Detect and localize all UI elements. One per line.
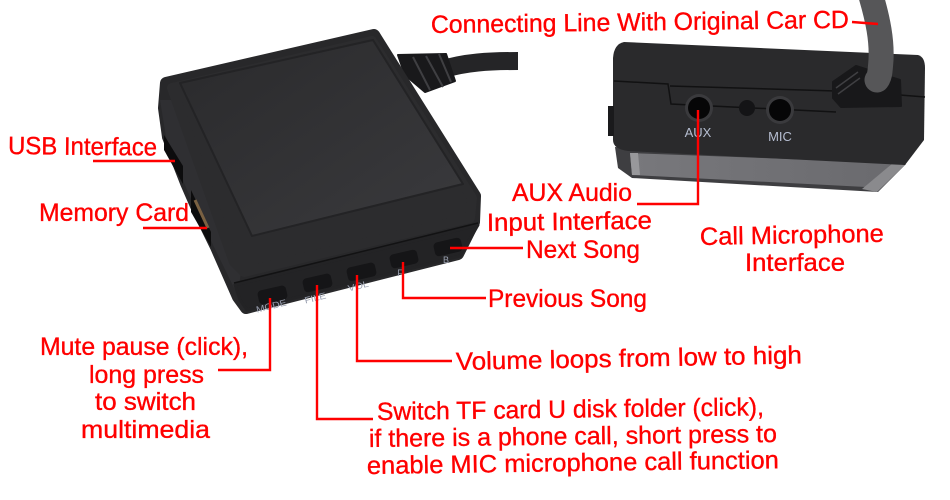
module left side face — [160, 100, 242, 296]
device: rear view of module — [608, 0, 925, 192]
module top inset panel — [180, 40, 463, 236]
usb slot — [164, 135, 183, 184]
callout: switch tf card — [317, 285, 779, 480]
callout: mute pause: multimedia — [81, 416, 210, 444]
callout: mute pause: long press — [89, 361, 204, 389]
callout: volume — [357, 275, 802, 376]
button: mode — [255, 285, 288, 315]
button: vol — [346, 262, 377, 293]
module body silhouette — [164, 35, 475, 308]
button: back: B — [443, 255, 449, 265]
callout: usb interface: USB Interface — [8, 132, 157, 162]
module seam — [234, 223, 478, 283]
side port nub — [608, 106, 614, 136]
device: main module, three-quarter view — [160, 35, 518, 315]
callout: aux audio input — [487, 110, 698, 237]
module front face — [235, 225, 478, 310]
rear seam — [614, 81, 925, 112]
strain relief: cable boot — [398, 54, 455, 92]
callout: call microphone: Call Microphone — [700, 220, 884, 251]
callout: mute pause — [40, 298, 270, 444]
silver base panel — [615, 147, 906, 192]
rear cable — [871, 0, 881, 80]
callout: memory card: Memory Card — [39, 199, 189, 227]
callout: switch tf card: Switch TF card U disk folder (click), — [377, 393, 764, 426]
callout: mute pause: Mute pause (click), — [40, 333, 248, 361]
aux label: AUX — [685, 125, 712, 140]
silver panel face — [630, 153, 893, 187]
rear body — [613, 42, 925, 165]
callout: connecting line: Connecting Line With Original Car CD — [431, 6, 849, 39]
callout: volume: Volume loops from low to high — [456, 341, 802, 376]
callout: call microphone — [700, 220, 884, 277]
mic jack — [766, 96, 794, 124]
button: file: FILE — [303, 291, 327, 306]
button: back — [433, 237, 463, 265]
module top face — [172, 41, 472, 272]
callout: aux audio input: AUX Audio — [512, 179, 632, 207]
button: vol: VOL — [347, 279, 370, 293]
mic label: MIC — [768, 129, 792, 144]
callout: next song: Next Song — [526, 236, 640, 264]
callout: switch tf card: enable MIC microphone call function — [367, 446, 779, 480]
aux jack — [685, 94, 713, 122]
callout: call microphone: Interface — [745, 249, 845, 277]
callout: previous song: Previous Song — [488, 285, 647, 313]
silver panel right strip — [862, 163, 905, 192]
memory card slot — [191, 190, 211, 247]
button: forward — [389, 249, 419, 278]
button: mode: MODE — [255, 297, 288, 315]
cable: main module lead — [440, 61, 518, 70]
button: file — [302, 273, 333, 306]
callout: aux audio input: Input Interface — [487, 207, 652, 237]
silver panel left strip — [630, 153, 640, 175]
callout: mute pause: to switch — [95, 388, 196, 416]
callout: previous song — [403, 262, 647, 313]
button: forward: F — [397, 268, 403, 278]
right angle connector — [833, 66, 901, 107]
led hole — [739, 100, 755, 116]
callout: switch tf card: if there is a phone call, short press to — [369, 420, 777, 453]
